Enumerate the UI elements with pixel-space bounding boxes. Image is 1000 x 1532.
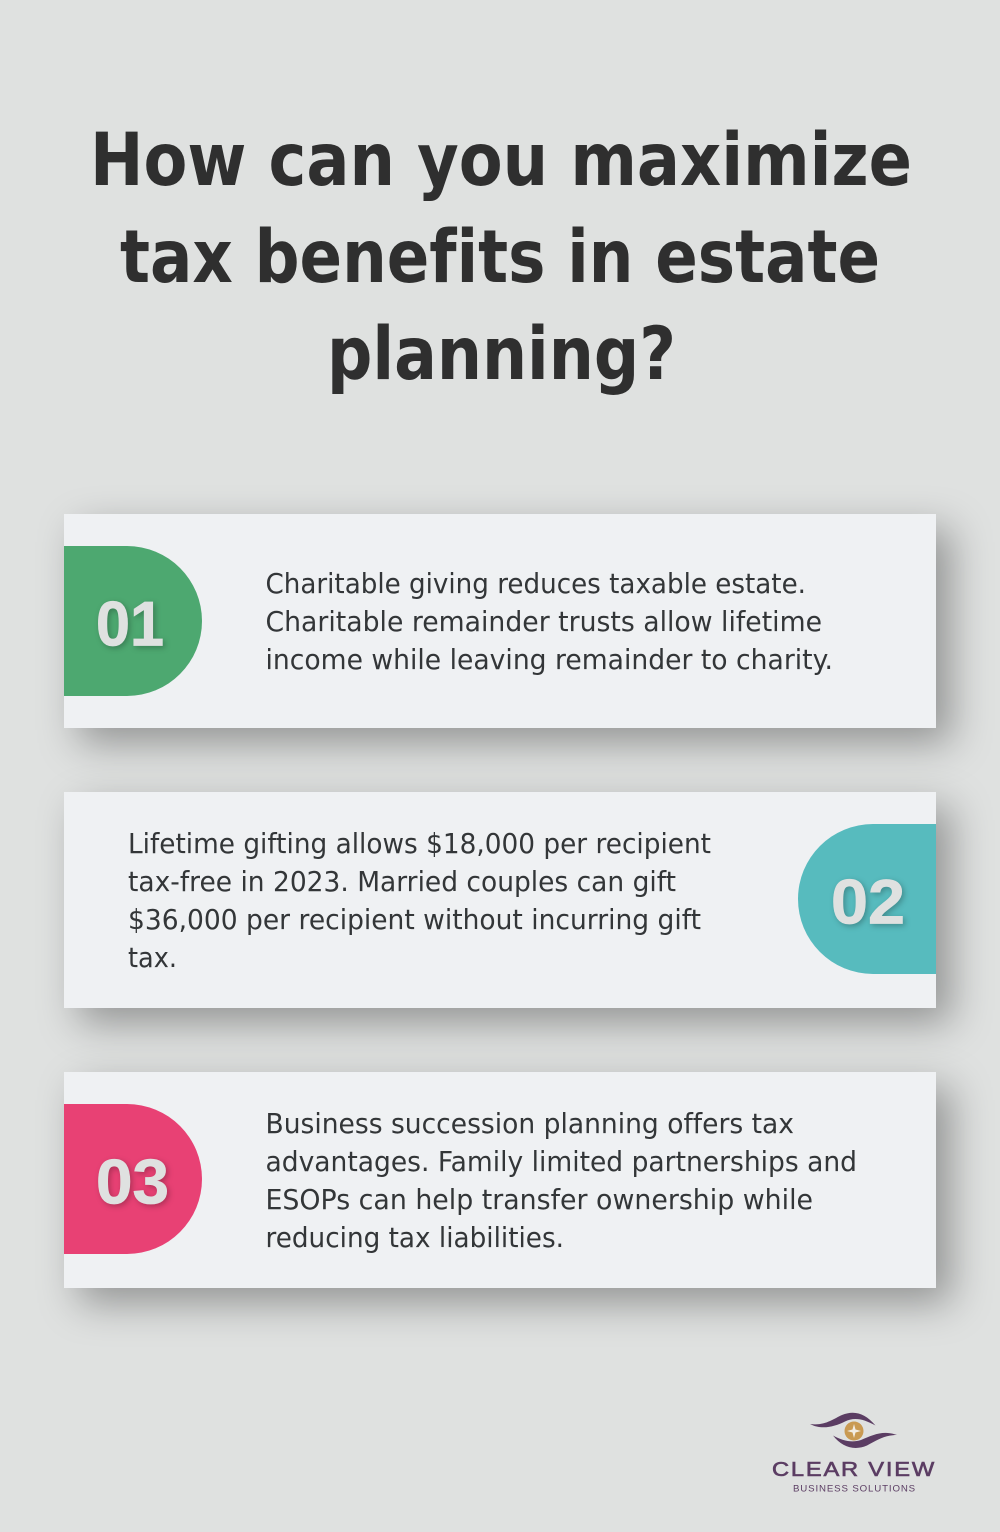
text block: lifetime gifting: tax. xyxy=(128,942,177,974)
text block: charitable giving: Charitable remainder trusts allow lifetime xyxy=(266,606,822,638)
text block: business succession: ESOPs can help transfer ownership while xyxy=(266,1184,813,1216)
logo tagline: BUSINESS SOLUTIONS xyxy=(793,1484,916,1494)
text block: lifetime gifting: Lifetime gifting allows $18,000 per recipient xyxy=(128,828,711,860)
text block: business succession: Business succession planning offers tax xyxy=(266,1108,794,1140)
icon: eye swooshes and star xyxy=(810,1413,897,1448)
text block: business succession: advantages. Family limited partnerships and xyxy=(266,1146,857,1178)
text block: business succession: reducing tax liabilities. xyxy=(266,1222,564,1254)
text block: lifetime gifting: tax-free in 2023. Married couples can gift xyxy=(128,866,676,898)
text block: business succession xyxy=(266,1108,857,1254)
logo: Clear View Business Solutions xyxy=(772,1413,936,1494)
title xyxy=(90,118,912,397)
text block: charitable giving: income while leaving remainder to charity. xyxy=(266,644,833,676)
badge: 01: 01 xyxy=(96,590,164,660)
panel: card 02 lifetime gifting xyxy=(64,792,936,1008)
title: planning? xyxy=(327,312,676,397)
title: tax benefits in estate xyxy=(120,215,880,300)
badge: 02: 02 xyxy=(831,868,905,938)
text block: lifetime gifting xyxy=(128,828,711,974)
badge: 01 xyxy=(64,546,202,696)
text block: charitable giving: Charitable giving reduces taxable estate. xyxy=(266,568,806,600)
text block: charitable giving xyxy=(266,568,833,676)
text block: lifetime gifting: $36,000 per recipient without incurring gift xyxy=(128,904,701,936)
badge: 03 xyxy=(64,1104,202,1254)
badge: 02 xyxy=(798,824,936,974)
logo wordmark: CLEAR VIEW xyxy=(772,1459,936,1481)
panel: card 03 business succession xyxy=(64,1072,936,1288)
panel: card 01 charitable giving xyxy=(64,514,936,728)
badge: 03: 03 xyxy=(96,1148,169,1218)
